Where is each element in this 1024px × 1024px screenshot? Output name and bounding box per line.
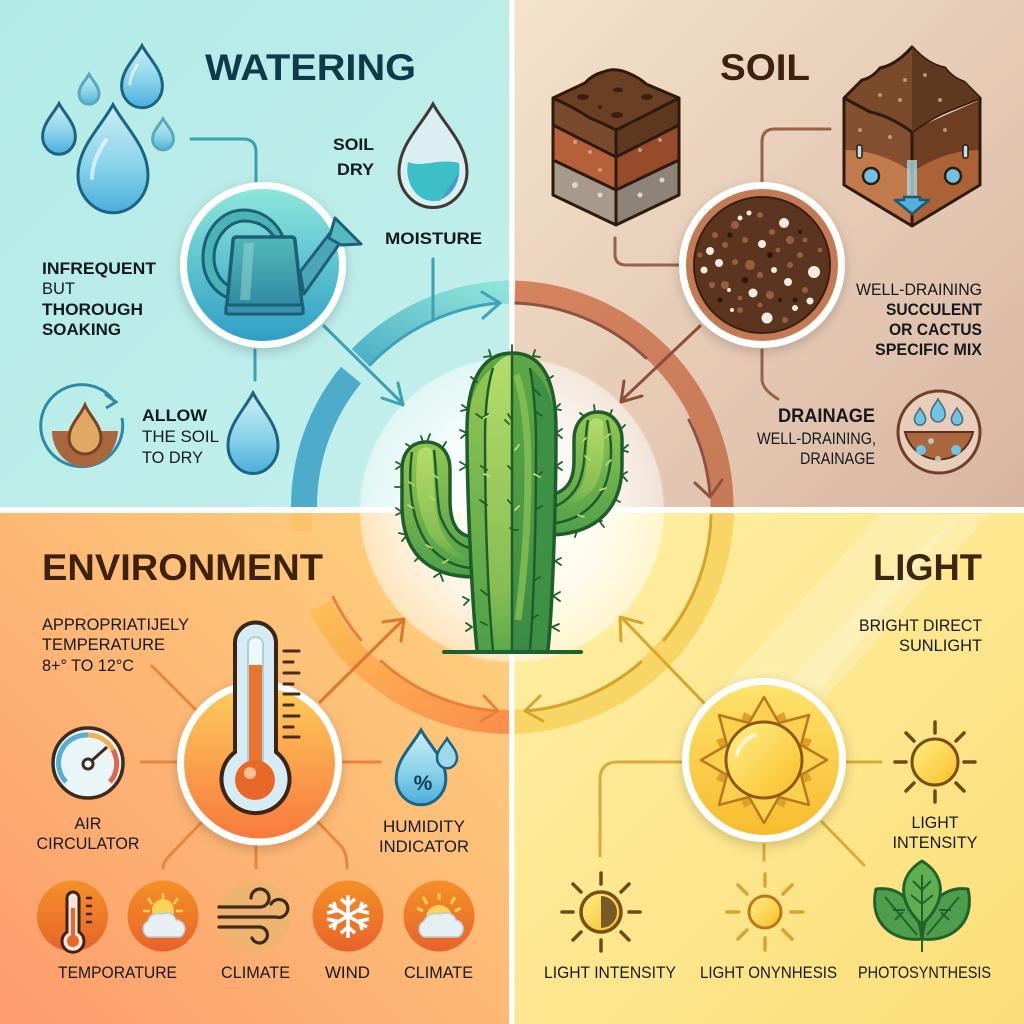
text: drainage: DRAINAGE bbox=[800, 449, 875, 468]
arrow to cactus bbox=[320, 619, 404, 702]
text: soil dry bbox=[333, 135, 375, 179]
icon: draining soil cube bbox=[844, 47, 980, 226]
icon: air gauge bbox=[53, 728, 123, 798]
icon: humidity drop: % bbox=[414, 772, 433, 795]
text: icon row labels: WIND bbox=[325, 963, 370, 982]
text: soil dry: SOIL bbox=[333, 135, 374, 154]
text: bright direct sunlight bbox=[859, 616, 982, 655]
cycle arc: environment bbox=[320, 597, 510, 722]
text: humidity indicator bbox=[379, 817, 469, 856]
icon: small sun bbox=[727, 874, 803, 950]
text: air circulator bbox=[36, 814, 140, 853]
text: infrequent soaking: THOROUGH bbox=[42, 300, 143, 319]
connector lines bbox=[191, 139, 433, 380]
icon: watering can badge bbox=[180, 182, 361, 348]
central cactus bbox=[395, 345, 628, 654]
text: humidity indicator: INDICATOR bbox=[379, 837, 469, 856]
text: icon row labels: TEMPORATURE bbox=[58, 963, 177, 982]
text: icon row labels bbox=[58, 963, 473, 982]
icon: half sun bbox=[562, 873, 640, 951]
panel: soil bbox=[553, 47, 983, 473]
icon: humidity drop bbox=[396, 730, 457, 805]
text: succulent mix: SUCCULENT bbox=[886, 300, 983, 319]
icon: sun badge bbox=[682, 678, 846, 842]
icon: sun and cloud bbox=[404, 880, 474, 952]
text: bright direct sunlight: BRIGHT DIRECT bbox=[859, 616, 982, 635]
panel: watering bbox=[41, 46, 482, 473]
connector lines bbox=[615, 129, 830, 399]
text: air circulator: AIR bbox=[74, 814, 102, 833]
main stem bbox=[442, 353, 583, 654]
cycle arc: watering bbox=[304, 292, 510, 507]
text: succulent mix: WELL-DRAINING bbox=[856, 280, 982, 299]
text: icon row labels: CLIMATE bbox=[221, 963, 290, 982]
icon: sun and cloud bbox=[128, 880, 198, 952]
text: infrequent soaking bbox=[42, 259, 157, 339]
spines bbox=[395, 345, 628, 631]
icon row: climate factors bbox=[37, 880, 474, 952]
icon: moisture drop bbox=[399, 104, 467, 208]
text: drainage: WELL-DRAINING, bbox=[757, 429, 876, 448]
text: drainage: DRAINAGE bbox=[778, 406, 875, 427]
text: succulent mix: SPECIFIC MIX bbox=[875, 340, 983, 359]
left arm bbox=[402, 442, 475, 577]
text: humidity indicator: HUMIDITY bbox=[383, 817, 465, 836]
text: allow soil to dry: ALLOW bbox=[142, 406, 208, 425]
icon: soil mix badge bbox=[679, 182, 845, 348]
text: infrequent soaking: SOAKING bbox=[42, 320, 121, 339]
text: bottom labels bbox=[544, 963, 991, 982]
text: light intensity bbox=[892, 813, 978, 852]
text: soil dry: DRY bbox=[337, 160, 375, 179]
heading: soil: SOIL bbox=[720, 47, 810, 88]
text: bottom labels: LIGHT INTENSITY bbox=[544, 963, 676, 982]
text: bright direct sunlight: SUNLIGHT bbox=[899, 636, 982, 655]
icon: temperature bbox=[37, 880, 108, 952]
icon: wind bbox=[219, 880, 290, 952]
connector lines bbox=[600, 762, 881, 865]
right arm bbox=[552, 412, 622, 535]
icon: group of water drops bbox=[43, 46, 173, 213]
heading: light: LIGHT bbox=[873, 547, 982, 588]
text: temperature range bbox=[42, 615, 189, 675]
text: allow soil to dry: TO DRY bbox=[142, 448, 203, 467]
icon: sun with rays bbox=[895, 722, 975, 802]
central glow bbox=[359, 357, 665, 663]
text: infrequent soaking: BUT bbox=[42, 279, 75, 298]
text: temperature range: 8+° TO 12°C bbox=[42, 656, 134, 675]
icon: layered soil cube bbox=[553, 70, 679, 225]
icon: snowflake bbox=[312, 880, 384, 952]
text: succulent mix: OR CACTUS bbox=[889, 320, 982, 339]
text: air circulator: CIRCULATOR bbox=[36, 834, 140, 853]
icon: single drop bbox=[228, 393, 278, 474]
text: light intensity: LIGHT bbox=[912, 813, 958, 832]
icon: soil dry cycle bbox=[41, 385, 123, 467]
text: infrequent soaking: INFREQUENT bbox=[42, 259, 157, 278]
text: moisture: MOISTURE bbox=[385, 229, 482, 248]
cycle arc: light bbox=[514, 513, 722, 722]
arrow to cactus bbox=[620, 617, 704, 703]
text: drainage bbox=[757, 406, 876, 468]
text: light intensity: INTENSITY bbox=[892, 833, 978, 852]
text: allow soil to dry: THE SOIL bbox=[142, 427, 219, 446]
text: temperature range: APPROPRIATIJELY bbox=[42, 615, 189, 634]
arrow to cactus bbox=[324, 326, 403, 405]
text: temperature range: TEMPERATURE bbox=[42, 635, 165, 654]
heading: environment: ENVIRONMENT bbox=[42, 547, 323, 588]
icon: drainage badge bbox=[898, 391, 980, 473]
icon: thermometer badge bbox=[177, 622, 342, 846]
icon: leaves bbox=[875, 861, 969, 952]
panel: light bbox=[544, 547, 991, 982]
heading: watering: WATERING bbox=[205, 47, 416, 88]
text: bottom labels: PHOTOSYNTHESIS bbox=[858, 963, 991, 982]
cycle arc: soil bbox=[515, 292, 722, 507]
arrow to cactus bbox=[621, 326, 700, 402]
text: icon row labels: CLIMATE bbox=[404, 963, 473, 982]
text: allow soil to dry bbox=[142, 406, 219, 467]
panel: environment bbox=[36, 547, 474, 982]
text: bottom labels: LIGHT ONYNHESIS bbox=[700, 963, 837, 982]
text: succulent mix bbox=[856, 280, 983, 359]
connector lines bbox=[141, 666, 380, 868]
